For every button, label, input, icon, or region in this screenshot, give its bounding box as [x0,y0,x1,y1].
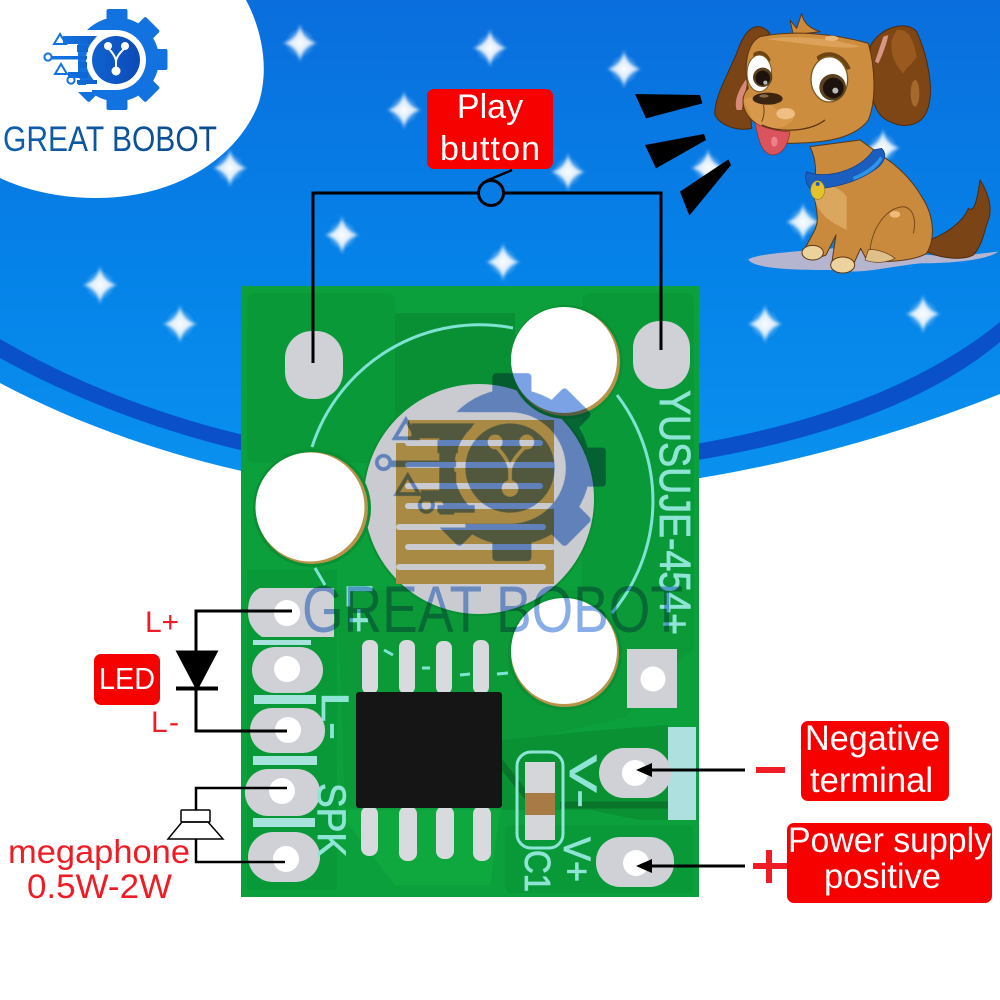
plus sign [753,850,788,883]
label: Negative terminal: terminal [810,761,933,800]
label: megaphone 0.5W-2W [8,833,190,906]
silkscreen labels: YUSUJE-454+ [650,390,699,635]
label: megaphone 0.5W-2W: 0.5W-2W [27,868,172,906]
silkscreen labels: C1 [517,850,558,892]
logo: GREAT BOBOT [0,0,264,198]
label: LED: LED [99,661,155,696]
logo: GREAT BOBOT: GREAT BOBOT [3,120,217,159]
LED wiring and diode symbol [176,611,292,731]
label: Negative terminal: Negative [805,719,940,758]
speaker wiring and symbol [168,788,287,862]
silkscreen labels: L+ [339,583,380,633]
mounting hole lower [508,596,622,710]
label: megaphone 0.5W-2W: megaphone [8,833,190,870]
label: Power supply positive [787,821,992,903]
capacitor C1 [517,752,563,848]
play button wiring [313,170,661,363]
switch pads [285,321,690,399]
label: Play button [427,88,553,169]
watermark logo [302,373,683,646]
label: L-: L- [151,706,179,739]
minus sign [756,767,785,773]
board base [241,286,699,897]
gold interdigitated comb [396,419,555,584]
copper pour areas [247,293,694,893]
watermark logo: GREAT BOBOT [302,572,683,646]
silkscreen labels: V- [561,755,603,808]
puppy illustration [715,13,998,273]
silkscreen labels: V+ [555,837,597,882]
right side pads [596,649,696,887]
label: Play button: button [440,130,540,168]
mounting hole left [253,449,371,567]
label: L+: L+ [145,606,179,639]
silkscreen labels: L- [313,692,355,740]
silkscreen labels: SPK [309,783,353,857]
left edge pads [245,588,334,882]
label: Negative terminal [801,719,949,801]
mounting hole top right [509,305,623,419]
negative terminal arrow [636,763,745,777]
label: Play button: Play [457,88,523,126]
IC chip [356,640,502,861]
sensor silver disc [363,383,595,615]
positive terminal arrow [636,859,745,873]
PCB module [241,286,699,897]
label: Power supply positive: positive [824,857,941,896]
label: LED [94,654,160,705]
sound wave wedges [635,94,731,216]
blue starry sky banner [0,0,1000,497]
silkscreen circle arcs [312,325,653,675]
silkscreen labels [309,390,699,892]
label: Power supply positive: Power supply [788,821,991,860]
